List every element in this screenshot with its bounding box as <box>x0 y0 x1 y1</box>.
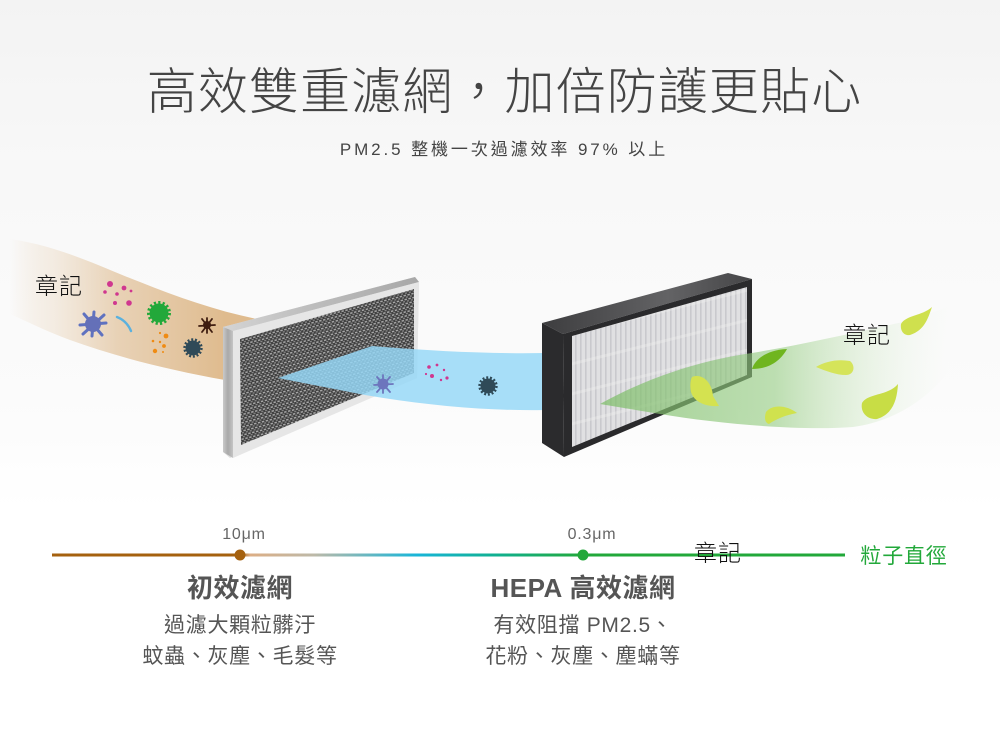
stamp label on axis: 章記 <box>694 540 742 566</box>
heading: HEPA filter: HEPA 高效濾網 <box>490 573 676 603</box>
HEPA filter body text <box>485 614 681 668</box>
label 0.3 micron: 0.3μm <box>568 526 616 543</box>
primary filter <box>223 277 419 458</box>
leaves <box>690 307 932 424</box>
title: 高效雙重濾網，加倍防護更貼心 <box>147 64 862 120</box>
brown polluted air stream <box>0 238 262 380</box>
HEPA filter body text: 花粉、灰塵、塵蟎等 <box>485 645 681 668</box>
particles after the first filter <box>374 364 496 394</box>
green clean air stream <box>600 298 968 428</box>
primary filter body text <box>142 614 338 668</box>
subtitle: PM2.5 整機一次過濾效率 97% 以上 <box>340 140 668 159</box>
stamp label right: 章記 <box>843 322 891 348</box>
heading: primary filter: 初效濾網 <box>187 573 293 603</box>
stamp label left: 章記 <box>35 273 83 299</box>
blue filtered air stream <box>278 346 545 410</box>
primary filter description <box>142 573 338 668</box>
primary filter body text: 過濾大顆粒髒汙 <box>164 614 316 637</box>
axis title: 粒子直徑 <box>860 545 948 568</box>
primary filter body text: 蚊蟲、灰塵、毛髮等 <box>142 645 338 668</box>
HEPA filter description <box>485 573 681 668</box>
label 10 micron: 10μm <box>222 526 266 543</box>
particles before the first filter <box>80 281 215 356</box>
HEPA filter <box>542 273 752 457</box>
HEPA filter body text: 有效阻擋 PM2.5、 <box>493 614 673 637</box>
